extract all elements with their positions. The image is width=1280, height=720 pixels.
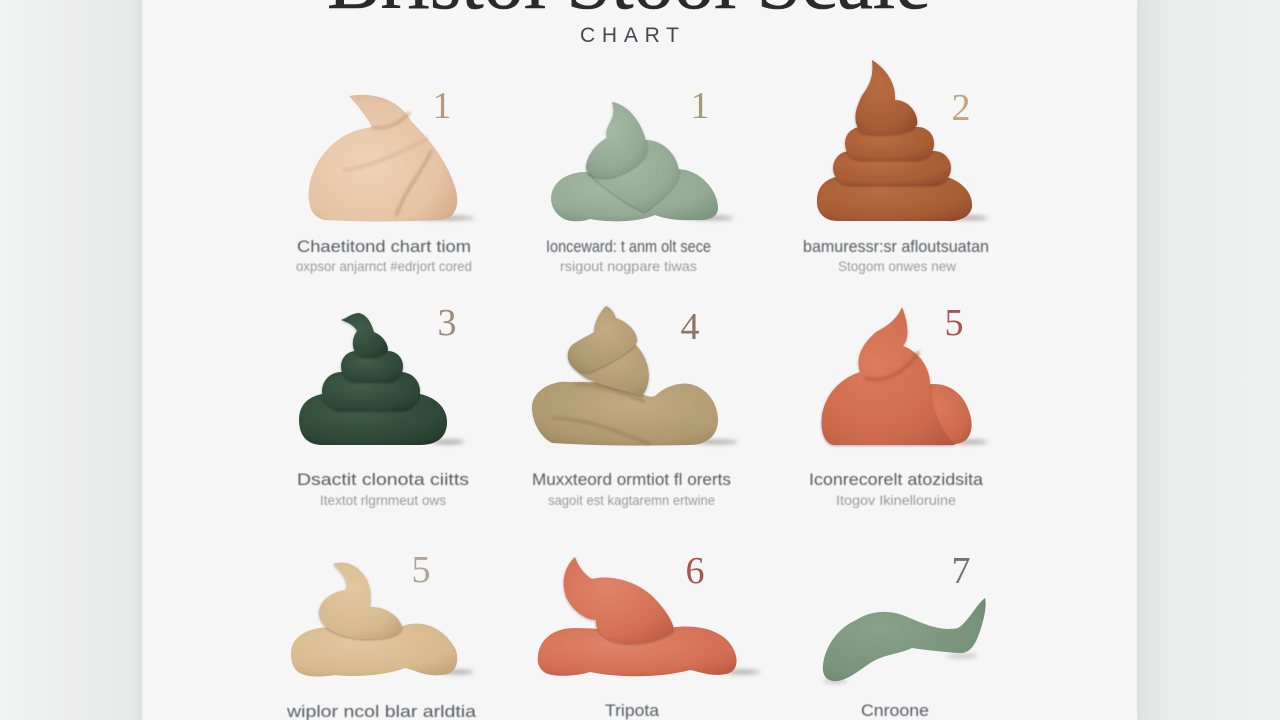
label: Ionceward: t anm olt sece	[546, 237, 711, 256]
number 6: 6	[686, 550, 704, 592]
number 5: 5	[412, 549, 430, 591]
icon: tan stool	[291, 563, 474, 677]
icon: peach stool	[309, 95, 475, 222]
number 4: 4	[680, 306, 700, 348]
description: Stogom onwes new	[838, 258, 957, 274]
poster card	[140, 0, 1139, 720]
description: oxpsor anjarnct #edrjort cored	[296, 258, 472, 274]
label: Dsactit clonota ciitts	[297, 470, 469, 489]
panel: type 5 terracotta swirl	[809, 302, 988, 508]
icon: khaki stool	[532, 306, 738, 446]
label: Muxxteord ormtiot fl orerts	[532, 470, 731, 489]
description: Itogov Ikinelloruine	[836, 492, 956, 508]
subtitle: CHART	[580, 24, 679, 47]
number 2: 2	[952, 87, 970, 129]
icon: sage stool	[551, 102, 734, 221]
number 7: 7	[952, 550, 970, 592]
label: Cnroone	[861, 701, 929, 720]
icon: terracotta stool	[822, 307, 988, 445]
icon: dark green stool	[299, 313, 464, 445]
label: bamuressr:sr afloutsuatan	[803, 237, 989, 256]
panel: type 3 dark green stack	[297, 302, 469, 508]
icon: coral stool	[538, 557, 760, 676]
panel: type 2 brown stack	[803, 60, 989, 274]
label: Iconrecorelt atozidsita	[809, 470, 984, 489]
icon: brown stool	[817, 60, 988, 221]
panel: type 1 sage swirl	[546, 85, 734, 274]
label: Chaetitond chart tiom	[297, 237, 471, 256]
panel: type 7 green worm	[823, 550, 986, 720]
description: sagoit est kagtaremn ertwine	[548, 492, 715, 508]
label: Tripota	[605, 701, 660, 720]
panel: type 1 peach lump	[296, 85, 475, 274]
number 1: 1	[690, 85, 710, 127]
description: rsigout nogpare tiwas	[560, 258, 697, 274]
number 3: 3	[438, 302, 456, 344]
panel: type 4 khaki knot	[532, 306, 738, 508]
panel: type 5 tan pile	[286, 549, 477, 720]
description: Itextot rlgrnmeut ows	[320, 492, 446, 508]
icon: green stool	[823, 598, 986, 683]
number 5: 5	[944, 302, 964, 344]
panel: type 6 coral pile	[538, 550, 760, 720]
number 1: 1	[432, 85, 452, 127]
